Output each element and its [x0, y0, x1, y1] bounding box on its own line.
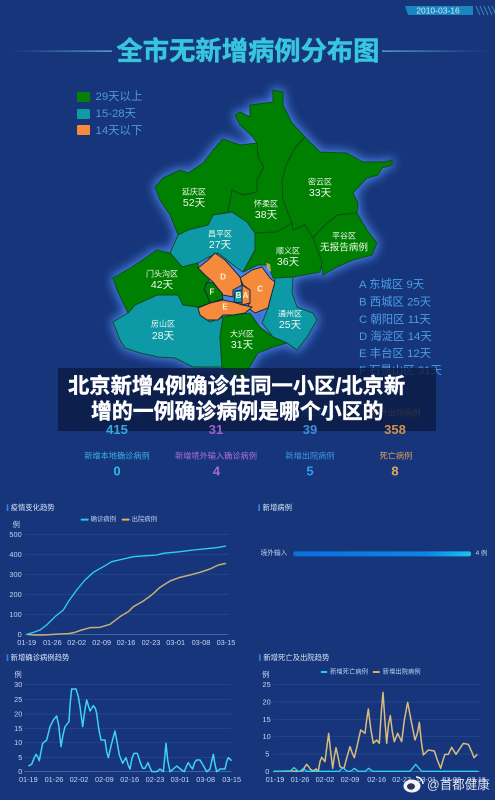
line: daily discharged — [273, 692, 477, 771]
district: Daxing — [220, 313, 287, 380]
axes and gridlines: 02-16 — [367, 775, 386, 784]
axes and gridlines: 02-09 — [95, 775, 114, 784]
map legend — [77, 90, 142, 137]
axes and gridlines: 10 — [263, 732, 271, 741]
axes and gridlines: 25 — [263, 680, 271, 689]
map labels: 门头沟区 — [146, 268, 178, 278]
district: Haidian — [198, 253, 242, 297]
daily statistics: 新增本地确诊病例 — [84, 450, 150, 460]
axes and gridlines: 0 — [18, 767, 22, 776]
district: Mentougou — [113, 250, 210, 313]
axes and gridlines: 0 — [18, 630, 22, 639]
map of Beijing districts — [113, 90, 392, 380]
axes and gridlines: 02-16 — [117, 638, 135, 647]
cumulative statistics: 累计确诊病例 — [92, 408, 142, 418]
axes and gridlines: 500 — [9, 530, 22, 539]
map labels: 顺义区 — [276, 246, 300, 256]
map labels: 怀柔区 — [254, 198, 278, 208]
axes and gridlines: 100 — [9, 610, 22, 619]
map labels: 密云区 — [308, 176, 332, 186]
chart: new cases — [258, 503, 487, 557]
bar: imported cases: 境外输入 — [261, 548, 288, 557]
small enclave — [266, 263, 271, 272]
axes and gridlines: 03-15 — [467, 775, 486, 784]
district: Yanqing — [155, 139, 264, 235]
cumulative values: 39 — [303, 422, 317, 437]
line: daily deaths — [273, 764, 478, 771]
map labels: C — [257, 284, 263, 294]
axes and gridlines: 03-15 — [217, 638, 235, 647]
axes and gridlines: 02-23 — [142, 638, 160, 647]
axes and gridlines: 03-01 — [171, 775, 189, 784]
map labels: 延庆区 — [182, 186, 206, 196]
map labels: 大兴区 — [230, 328, 254, 338]
chart title: 新增病例 — [263, 503, 292, 512]
axes and gridlines — [14, 670, 241, 784]
map labels: B — [236, 291, 242, 300]
district: Shunyi — [243, 223, 322, 278]
axes and gridlines: 03-08 — [442, 775, 461, 784]
axes and gridlines: 02-02 — [70, 775, 88, 784]
axes and gridlines: 01-19 — [17, 638, 36, 647]
chart title: 新增死亡及出院趋势 — [263, 653, 330, 662]
district: Changping — [170, 212, 255, 272]
chart: new deaths and discharges — [259, 653, 486, 784]
axes and gridlines: 200 — [9, 590, 22, 599]
axes and gridlines: 03-15 — [222, 775, 241, 784]
daily statistics: 8 — [391, 464, 399, 478]
cumulative statistics — [92, 408, 421, 418]
daily statistics: 5 — [306, 464, 314, 478]
cumulative statistics: 累计死亡病例 — [285, 408, 335, 418]
axes and gridlines: 5 — [18, 753, 22, 762]
district: Miyun — [282, 137, 392, 238]
map legend: 29天以上 — [96, 90, 142, 103]
axes and gridlines: 25 — [14, 695, 22, 704]
axes and gridlines: 03-01 — [417, 775, 436, 784]
daily statistics: 4 — [213, 464, 221, 478]
map labels: 52天 — [183, 197, 206, 209]
chart: epidemic trend — [7, 503, 235, 647]
district: Fangshan — [113, 295, 223, 367]
axes and gridlines: 03-08 — [192, 638, 210, 647]
district list: B 西城区 25天 — [359, 296, 431, 308]
axes and gridlines: 02-16 — [120, 775, 139, 784]
daily statistics: 死亡病例 — [380, 450, 412, 460]
cumulative statistics: 累计境外输入病例 — [183, 408, 249, 418]
axes and gridlines: 30 — [14, 680, 22, 689]
axes and gridlines: 01-26 — [43, 638, 62, 647]
district list: E 丰台区 12天 — [359, 346, 431, 360]
map labels: 42天 — [151, 279, 174, 291]
line: cumulative discharged — [27, 563, 226, 635]
axes and gridlines: 例 — [13, 520, 20, 529]
map labels: E — [222, 302, 228, 312]
line: cumulative confirmed — [27, 546, 226, 634]
axes and gridlines: 0 — [265, 767, 269, 776]
map labels: 25天 — [279, 319, 302, 331]
axes and gridlines: 01-19 — [19, 775, 38, 784]
icon: weibo logo — [404, 777, 423, 792]
date badge: 2010-03-16 — [416, 6, 460, 16]
axes and gridlines: 02-02 — [67, 638, 86, 647]
axes and gridlines: 03-01 — [166, 638, 185, 647]
axes and gridlines: 10 — [14, 738, 22, 747]
map labels: 33天 — [309, 187, 332, 199]
district: Pinggu — [313, 213, 377, 275]
map labels: 昌平区 — [208, 230, 232, 238]
axes and gridlines: 例 — [262, 670, 269, 679]
axes and gridlines: 02-23 — [392, 775, 411, 784]
district list: F 石景山区 31天 — [359, 364, 442, 377]
district: Chaoyang — [240, 267, 275, 313]
chart title: 疫情变化趋势 — [11, 503, 55, 512]
map labels — [146, 176, 368, 351]
cumulative values: 31 — [209, 422, 223, 437]
daily statistics — [84, 450, 412, 478]
watermark — [404, 777, 490, 792]
daily statistics: 0 — [113, 464, 121, 478]
district: Shijingshan — [204, 282, 223, 303]
chart legend — [321, 666, 421, 675]
axes and gridlines — [9, 520, 235, 647]
axes and gridlines: 15 — [14, 724, 22, 733]
headline banner: 增的一例确诊病例是哪个小区的 — [91, 400, 383, 424]
axes and gridlines: 400 — [9, 550, 22, 559]
watermark: @首都健康 — [427, 777, 490, 792]
headline banner: 北京新增4例确诊住同一小区/北京新 — [68, 374, 405, 398]
map labels: F — [210, 288, 215, 296]
line: daily new confirmed — [28, 689, 232, 772]
map labels: 36天 — [277, 256, 300, 268]
axes and gridlines: 01-19 — [266, 775, 284, 784]
axes and gridlines: 20 — [14, 709, 22, 718]
map legend: 15-28天 — [96, 108, 136, 120]
axes and gridlines: 01-26 — [291, 775, 309, 784]
map labels: D — [220, 272, 226, 282]
map labels: 房山区 — [151, 318, 175, 328]
map labels: 无报告病例 — [320, 242, 368, 254]
axes and gridlines: 20 — [263, 697, 271, 706]
district list: C 朝阳区 11天 — [359, 313, 431, 326]
axes and gridlines: 5 — [265, 749, 269, 758]
map labels: 28天 — [152, 330, 175, 342]
axes and gridlines: 03-08 — [196, 775, 215, 784]
axes and gridlines: 例 — [14, 670, 22, 679]
axes and gridlines: 02-09 — [92, 638, 111, 647]
cumulative values — [106, 422, 406, 437]
map labels: 27天 — [209, 239, 232, 251]
district: Huairou — [228, 90, 305, 233]
chart legend: 确诊病例 — [91, 514, 116, 523]
chart legend: 出院病例 — [132, 514, 157, 523]
title: 全市无新增病例分布图 — [117, 36, 379, 66]
district list: D 海淀区 14天 — [359, 329, 432, 343]
map labels: 31天 — [231, 339, 254, 351]
headline banner — [58, 368, 436, 431]
map labels: 38天 — [255, 209, 278, 221]
axes and gridlines: 02-23 — [146, 775, 164, 784]
date badge — [405, 6, 495, 16]
district: Dongcheng — [242, 285, 250, 305]
chart legend: 新增死亡病例 — [330, 666, 368, 675]
daily statistics: 新增出院病例 — [285, 450, 335, 460]
axes and gridlines: 15 — [263, 715, 271, 724]
district: Fengtai — [198, 300, 252, 320]
district: Tongzhou — [262, 277, 317, 350]
map labels: 平谷区 — [332, 232, 356, 240]
bar: imported cases — [261, 548, 487, 557]
axes and gridlines: 300 — [9, 570, 22, 579]
axes and gridlines: 01-26 — [45, 775, 63, 784]
district list — [359, 278, 442, 377]
axes and gridlines — [262, 670, 486, 784]
cumulative values: 358 — [384, 422, 406, 437]
bar: imported cases: 4 例 — [476, 548, 487, 557]
daily statistics: 新增境外输入确诊病例 — [175, 450, 257, 460]
chart title: 新增确诊病例趋势 — [11, 653, 70, 662]
axes and gridlines: 02-02 — [316, 775, 334, 784]
cumulative statistics: 累计出院病例 — [371, 408, 421, 418]
chart: new confirmed trend — [7, 653, 241, 784]
chart legend: 新增出院病例 — [383, 666, 421, 675]
map legend: 14天以下 — [96, 124, 142, 137]
chart legend — [81, 514, 157, 523]
district: Xicheng — [234, 290, 242, 303]
map labels: 通州区 — [278, 308, 302, 318]
map labels: A — [243, 291, 249, 300]
axes and gridlines: 02-09 — [341, 775, 359, 784]
district list: A 东城区 9天 — [359, 278, 424, 291]
cumulative values: 415 — [106, 422, 128, 437]
